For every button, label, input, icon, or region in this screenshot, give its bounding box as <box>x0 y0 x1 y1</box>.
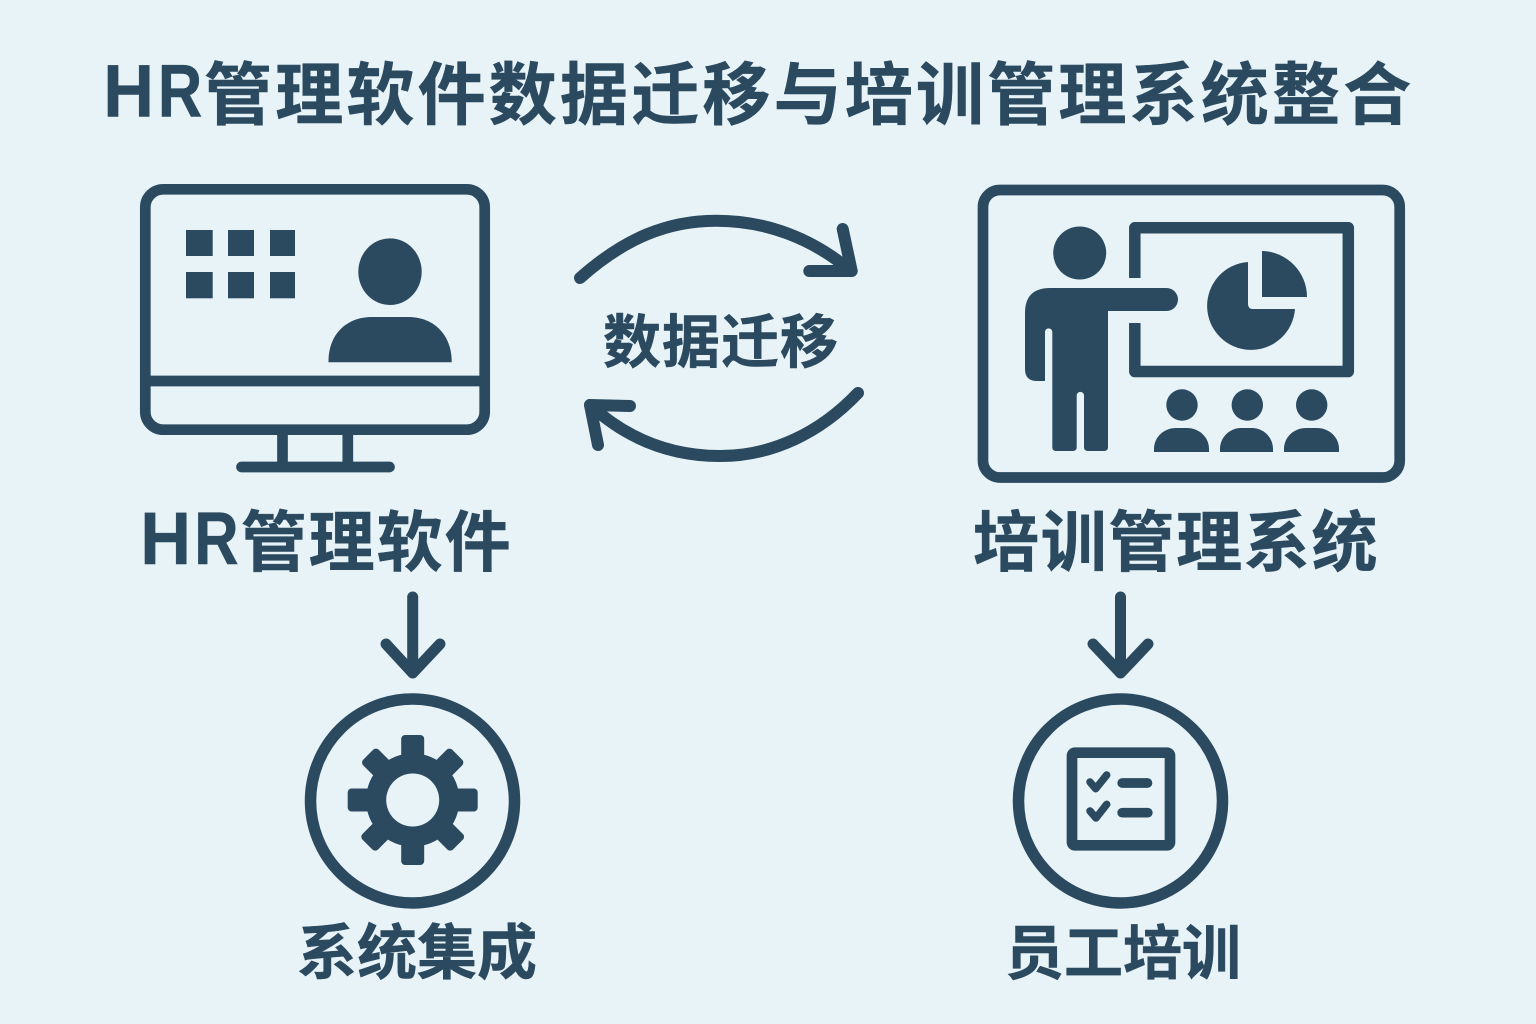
icon: checklist <box>1018 699 1222 903</box>
icon: gear <box>310 699 514 903</box>
title: 管理软件数据迁移与培训管理系统整合 <box>204 58 1414 134</box>
arrow: HR down <box>386 597 440 673</box>
label: HR software <box>140 498 513 580</box>
label: system integration: 系统集成 <box>297 920 537 987</box>
arrow: migration forward <box>580 221 852 278</box>
icon: HR software monitor <box>145 189 485 467</box>
icon: training system <box>983 190 1400 478</box>
label: HR software: R <box>194 498 239 580</box>
arrow: migration back <box>590 393 858 456</box>
label: data migration: 数据迁移 <box>603 310 839 376</box>
label: training system: 培训管理系统 <box>973 506 1379 580</box>
label: staff training: 员工培训 <box>1005 921 1241 987</box>
title: R <box>158 50 202 133</box>
title: H <box>103 51 154 133</box>
label: HR software: H <box>140 498 191 580</box>
arrow: training down <box>1093 597 1148 673</box>
label: HR software: 管理软件 <box>241 506 513 580</box>
